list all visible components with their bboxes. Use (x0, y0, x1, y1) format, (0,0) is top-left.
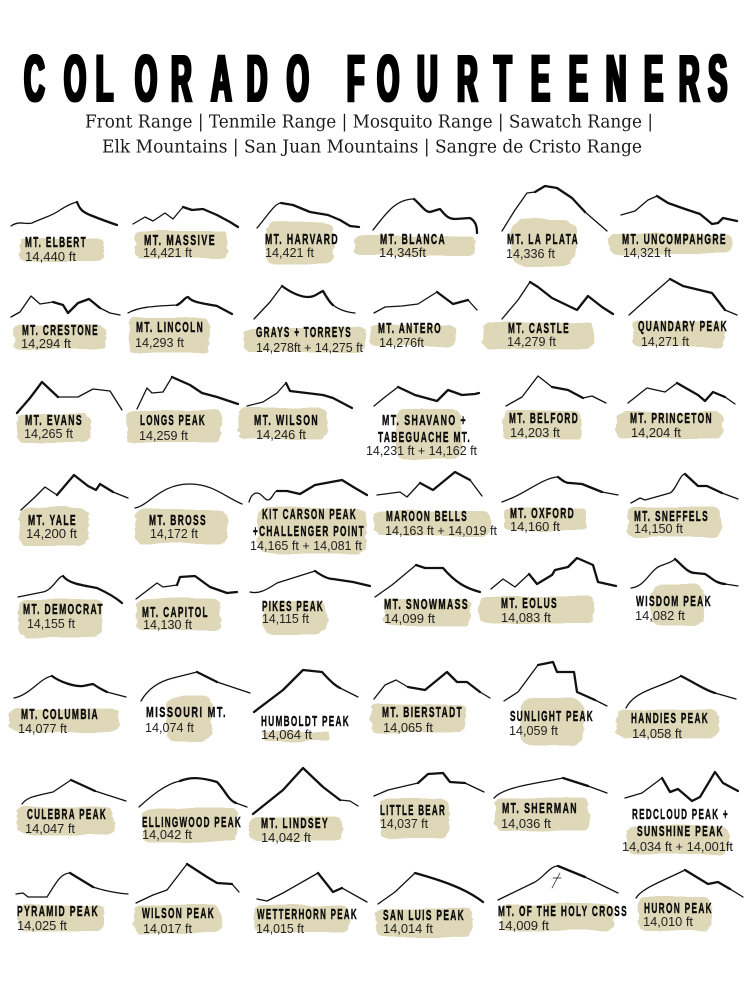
ridge line (506, 376, 606, 406)
card: Mt. Antero (370, 292, 477, 350)
card: Mt. Snowmass (375, 565, 480, 626)
name (253, 506, 365, 540)
ridge line (375, 565, 480, 597)
brush swatch (521, 698, 584, 746)
brush swatch (354, 236, 476, 256)
brush swatch (479, 596, 594, 623)
brush swatch (609, 233, 732, 254)
name: TABEGUACHE MT. (378, 429, 471, 446)
brush swatch (17, 414, 90, 443)
brush swatch (616, 412, 723, 439)
brush swatch (244, 328, 366, 352)
card: Mt. of the Holy Cross (498, 866, 628, 933)
elevation: 14,294 ft (21, 337, 72, 351)
card: Pikes Peak (250, 571, 370, 634)
brush swatch (143, 808, 237, 842)
name: WETTERHORN PEAK (257, 906, 358, 923)
name: MT. BROSS (149, 512, 207, 529)
elevation: 14,172 ft (150, 527, 199, 541)
name: MT. LINDSEY (261, 815, 329, 832)
ridge line (621, 196, 737, 224)
ridge line (133, 207, 238, 227)
card: San Luis Peak (376, 873, 483, 937)
name: MT. ELBERT (25, 234, 87, 251)
name: WILSON PEAK (142, 905, 215, 922)
ridge line (377, 472, 482, 497)
elevation: 14,082 ft (635, 609, 686, 623)
name: MT. BIERSTADT (382, 704, 463, 721)
elevation: 14,065 ft (383, 721, 434, 735)
ridge line (253, 768, 358, 814)
ridge line (137, 377, 238, 409)
name: MT. OXFORD (510, 505, 575, 522)
ridge line (249, 480, 367, 502)
elevation: 14,015 ft (256, 922, 305, 936)
elevation: 14,278ft + 14,275 ft (256, 341, 364, 355)
ridge line (491, 558, 616, 589)
brush swatch (263, 601, 327, 634)
name: LONGS PEAK (140, 412, 206, 429)
brush swatch (381, 798, 449, 839)
card: Mt. Crestone (11, 296, 120, 351)
ridge line (502, 477, 618, 502)
elevation: 14,010 ft (643, 915, 694, 929)
ridge line (626, 676, 736, 708)
name: MT. CRESTONE (22, 322, 99, 339)
ridge line (628, 383, 735, 404)
elevation: 14,130 ft (143, 618, 193, 632)
name: MISSOURI MT. (146, 704, 227, 721)
card: Pyramid Peak (16, 873, 128, 933)
ridge line (18, 576, 122, 603)
ridge line (254, 286, 355, 319)
card: Mt. Uncompahgre (609, 196, 737, 260)
name: MT. OF THE HOLY CROSS (498, 903, 628, 920)
brush swatch (129, 318, 209, 352)
brush swatch (633, 321, 724, 347)
card: Sunlight Peak (504, 662, 607, 746)
ridge line (374, 672, 490, 699)
ridge line (11, 296, 120, 317)
ridge line (631, 559, 738, 588)
ridge line (136, 864, 239, 903)
card: Mt. Yale (19, 475, 128, 546)
brush swatch (127, 410, 221, 442)
elevation: 14,276ft (379, 336, 425, 350)
brush swatch (384, 599, 471, 626)
brush swatch (266, 222, 334, 264)
elevation: 14,204 ft (631, 426, 682, 440)
elevation: 14,440 ft (25, 250, 77, 264)
ridge line (250, 571, 370, 593)
name: MT. CAPITOL (142, 604, 209, 621)
name: MT. BELFORD (509, 410, 579, 427)
elevation: 14,083 ft (501, 611, 552, 625)
ridge line (373, 199, 477, 233)
ridge line (629, 279, 737, 315)
brush swatch (628, 507, 721, 537)
name: CULEBRA PEAK (27, 806, 107, 823)
name (378, 412, 471, 446)
ridge line (257, 873, 367, 902)
card: Wilson Peak (134, 864, 239, 936)
card: Kit Carson Peak + Challenger Point (249, 480, 367, 554)
card: Mt. Evans (17, 382, 122, 443)
name: PIKES PEAK (262, 598, 324, 615)
brush swatch (135, 510, 227, 544)
ridge line (141, 672, 250, 701)
card: Mt. Sneffels (628, 474, 738, 537)
card: Redcloud Peak + Sunshine Peak (622, 772, 738, 854)
brush swatch (263, 731, 329, 742)
name: MT. YALE (28, 512, 77, 529)
brush swatch (135, 231, 227, 258)
name: GRAYS + TORREYS (256, 324, 352, 341)
ridge line (494, 778, 607, 798)
elevation: 14,047 ft (25, 822, 76, 836)
brush swatch (626, 826, 729, 854)
elevation: 14,321 ft (623, 246, 672, 260)
elevation: 14,345ft (379, 246, 427, 260)
ridge line (254, 670, 358, 712)
title: COLORADO FOURTEENERS (24, 41, 727, 115)
card: Mt. Shavano + Tabeguache Mt. (366, 387, 479, 459)
name: MT. SNOWMASS (384, 596, 469, 613)
name: MT. WILSON (254, 412, 319, 429)
name: SUNLIGHT PEAK (510, 708, 594, 725)
card: Mt. Princeton (616, 383, 735, 440)
card: Humboldt Peak (254, 670, 358, 742)
card: Mt. Oxford (502, 477, 618, 534)
ridge line (21, 475, 128, 510)
card: Mt. Bierstadt (371, 672, 490, 735)
elevation: 14,009 ft (498, 919, 550, 933)
card: Little Bear (374, 773, 484, 839)
brush swatch (14, 325, 106, 349)
elevation: 14,155 ft (27, 617, 76, 631)
ridge line (374, 773, 484, 796)
elevation: 14,099 ft (384, 612, 436, 626)
elevation: 14,203 ft (510, 426, 561, 440)
elevation: 14,246 ft (256, 428, 307, 442)
elevation: 14,058 ft (632, 727, 683, 741)
brush swatch (483, 322, 594, 349)
elevation: 14,271 ft (641, 335, 690, 349)
brush swatch (511, 219, 576, 266)
ridge line (498, 866, 618, 900)
brush swatch (376, 908, 472, 937)
card: Ellingwood Peak (139, 778, 247, 842)
subtitle: ranges: Front Range | Tenmile Range | Mosquito Range | Sawatch Range | (85, 112, 653, 132)
brush swatch (396, 409, 461, 459)
elevation: 14,265 ft (24, 427, 74, 441)
card: Wisdom Peak (631, 559, 738, 626)
brush swatch (19, 599, 102, 637)
card: Mt. Lincoln (128, 297, 232, 352)
elevation: 14,042 ft (142, 828, 193, 842)
ridge line (16, 873, 128, 897)
elevation: 14,165 ft + 14,081 ft (250, 539, 363, 553)
ridge line (128, 297, 232, 314)
card: Longs Peak (127, 377, 238, 443)
card: Mt. Columbia (9, 676, 126, 736)
elevation: 14,279 ft (507, 335, 557, 349)
elevation: 14,231 ft + 14,162 ft (366, 444, 478, 458)
ridge line (378, 873, 483, 904)
card: Maroon Bells (373, 472, 498, 538)
elevation: 14,042 ft (261, 831, 312, 845)
card: Mt. Bross (135, 484, 242, 544)
elevation: 14,059 ft (509, 724, 559, 738)
elevation: 14,077 ft (18, 722, 68, 736)
elevation: 14,064 ft (261, 728, 313, 742)
ridge line (631, 474, 738, 503)
brush swatch (503, 411, 582, 439)
elevation: 14,150 ft (634, 522, 684, 536)
name: LITTLE BEAR (380, 802, 446, 819)
brush swatch (166, 696, 212, 741)
name: PYRAMID PEAK (17, 903, 99, 920)
card: Mt. Sherman (494, 778, 607, 831)
card: Mt. Wilson (238, 383, 352, 442)
ridge line (504, 662, 607, 706)
card: Quandary Peak (629, 279, 737, 349)
ridge line (502, 282, 613, 319)
brush swatch (638, 896, 712, 931)
name: MT. SHAVANO + (382, 412, 467, 429)
name: MT. EVANS (25, 412, 83, 429)
name: KIT CARSON PEAK (262, 506, 357, 523)
brush swatch (504, 508, 586, 531)
brush swatch (249, 817, 342, 842)
brush swatch (501, 904, 614, 931)
name: HUMBOLDT PEAK (261, 713, 350, 730)
name: MT. BLANCA (380, 231, 446, 248)
brush swatch (616, 710, 719, 738)
name: MT. LA PLATA (507, 231, 579, 248)
ridge line (139, 778, 247, 807)
card: Mt. Belford (503, 376, 606, 440)
elevation: 14,421 ft (265, 246, 315, 260)
elevation: 14,014 ft (383, 922, 434, 936)
card: Culebra Peak (17, 780, 126, 836)
elevation: 14,200 ft (26, 527, 78, 541)
name: MT. DEMOCRAT (23, 601, 104, 618)
card: Mt. Elbert (11, 202, 117, 264)
subtitle: ranges (85, 112, 653, 158)
ridge line (17, 382, 122, 413)
card: Mt. Blanca (354, 199, 477, 260)
brush swatch (19, 239, 104, 262)
name: MT. SHERMAN (502, 800, 578, 817)
brush swatch (371, 704, 466, 732)
brush swatch (19, 507, 89, 546)
elevation: 14,074 ft (145, 721, 195, 735)
brush swatch (495, 798, 589, 831)
elevation: 14,115 ft (262, 612, 310, 626)
card: Mt. Democrat (18, 576, 122, 637)
name: MT. LINCOLN (136, 319, 204, 336)
elevation: 14,025 ft (17, 919, 68, 933)
brush swatch (258, 508, 366, 554)
card: Huron Peak (636, 870, 743, 931)
elevation: 14,163 ft + 14,019 ft (385, 524, 498, 538)
elevation: 14,160 ft (510, 520, 561, 534)
card: Grays + Torreys (244, 286, 366, 355)
name: MT. ANTERO (378, 320, 442, 337)
card: Mt. Capitol (136, 576, 237, 632)
brush swatch (136, 599, 221, 630)
brush swatch (370, 325, 456, 346)
brush swatch (17, 807, 114, 835)
card: Wetterhorn Peak (254, 873, 367, 936)
elevation: 14,293 ft (135, 336, 185, 350)
elevation: 14,036 ft (501, 817, 552, 831)
name: +CHALLENGER POINT (253, 523, 365, 540)
brush swatch (18, 905, 104, 931)
name (632, 806, 729, 840)
card: Mt. Massive (133, 207, 238, 260)
ridge line (14, 676, 126, 698)
card: Mt. Lindsey (249, 768, 358, 845)
card: Handies Peak (616, 676, 736, 741)
card: Mt. Castle (483, 282, 613, 349)
card: Mt. La Plata (502, 186, 607, 266)
name: SAN LUIS PEAK (383, 907, 465, 924)
subtitle: ranges: Elk Mountains | San Juan Mountains | Sangre de Cristo Range (102, 138, 642, 158)
brush swatch (9, 708, 120, 732)
brush swatch (134, 905, 222, 933)
elevation: 14,037 ft (380, 817, 429, 831)
ridge line (136, 576, 237, 599)
name: MT. MASSIVE (144, 232, 216, 249)
name: MT. CASTLE (508, 320, 570, 337)
ridge line (257, 203, 359, 228)
brush swatch (651, 584, 704, 626)
name: ELLINGWOOD PEAK (142, 814, 242, 831)
ridge line (11, 202, 117, 226)
brush swatch (373, 511, 491, 536)
card: Missouri Mt. (141, 672, 250, 741)
elevation: 14,421 ft (143, 246, 193, 260)
name: MT. COLUMBIA (21, 706, 99, 723)
brush swatch (254, 905, 349, 933)
name: MAROON BELLS (386, 508, 468, 525)
elevation: 14,034 ft + 14,001ft (622, 840, 734, 854)
name: MT. HARVARD (265, 231, 339, 248)
ridge line (636, 870, 743, 898)
brush swatch (238, 408, 327, 439)
ridge line (374, 292, 477, 313)
card: Mt. Harvard (257, 203, 359, 264)
ridge line (247, 383, 352, 408)
card: Mt. Eolus (479, 558, 616, 625)
ridge line (135, 484, 242, 508)
ridge line (625, 772, 738, 801)
ridge line (502, 186, 607, 231)
elevation: 14,336 ft (506, 247, 556, 261)
ridge line (374, 387, 479, 406)
elevation: 14,259 ft (139, 429, 189, 443)
name: MT. EOLUS (501, 595, 558, 612)
elevation: 14,017 ft (143, 922, 193, 936)
ridge line (22, 780, 126, 804)
